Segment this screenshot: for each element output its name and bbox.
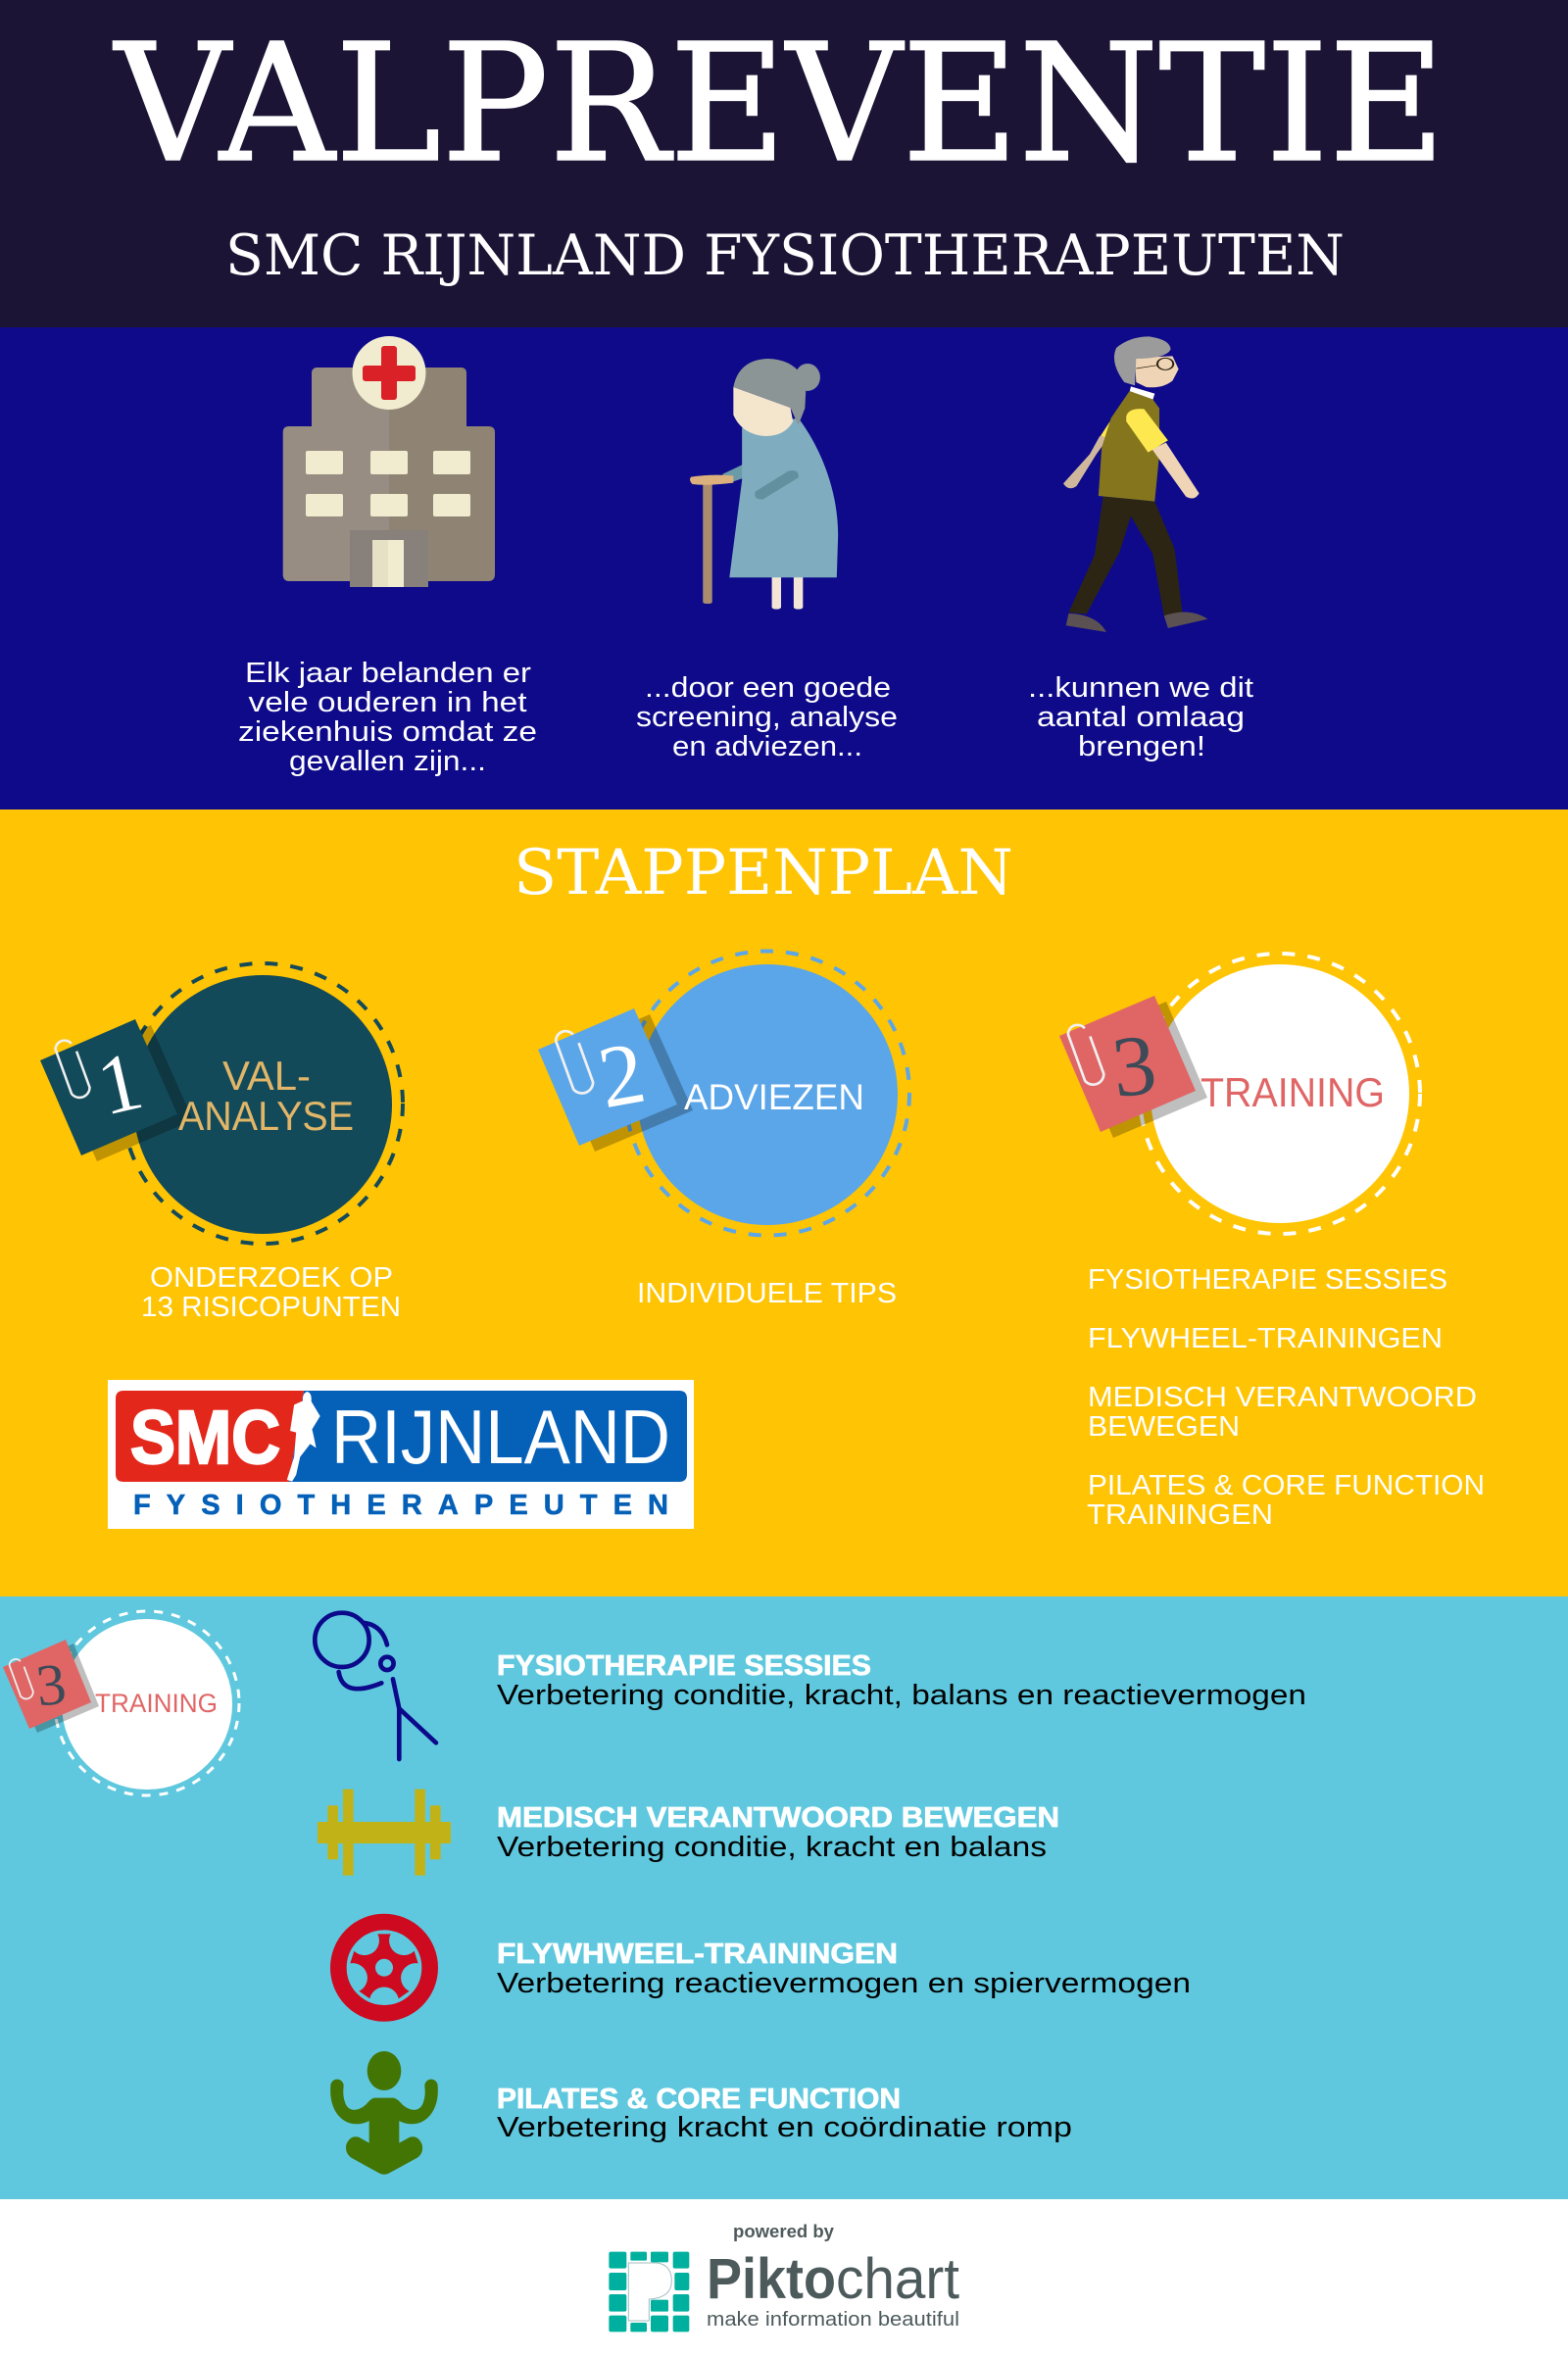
step 3 list: BEWEGEN (1088, 1411, 1240, 1443)
text block: hospital: gevallen zijn... (289, 746, 486, 777)
step 3 list: PILATES & CORE FUNCTION (1088, 1470, 1485, 1501)
panel: training details (0, 1596, 1568, 2199)
text block: result: ...kunnen we dit (1028, 672, 1253, 704)
subtitle: SMC RIJNLAND FYSIOTHERAPEUTEN (225, 223, 1345, 288)
text block: hospital: vele ouderen in het (249, 687, 527, 718)
logo: SMC Rijnland Fysiotherapeuten: SMC (130, 1396, 280, 1480)
text block: result: brengen! (1078, 731, 1205, 762)
piktochart wordmark (707, 2247, 959, 2331)
text: fysiotherapie sessies (497, 1650, 1306, 1711)
icon: meditating figure (330, 2051, 438, 2175)
step 3 badge (1059, 954, 1420, 1234)
step 3 list: FLYWHEEL-TRAININGEN (1088, 1323, 1443, 1354)
step 1 badge: 1 (89, 1034, 151, 1134)
piktochart wordmark: make information beautiful (707, 2309, 959, 2331)
icon: barbell (318, 1790, 451, 1876)
text: flywheel-trainingen: FLYWHWEEL-TRAININGEN (497, 1939, 898, 1970)
step 3 list: FYSIOTHERAPIE SESSIES (1088, 1264, 1447, 1296)
title: VALPREVENTIE (113, 10, 1446, 199)
icon: piktochart logo (609, 2252, 689, 2331)
text: flywheel-trainingen (497, 1939, 1191, 1999)
piktochart wordmark: Pikto (707, 2247, 836, 2311)
panel: header (0, 0, 1568, 327)
step 3 list (1087, 1264, 1485, 1531)
step 2 badge: ADVIEZEN (684, 1077, 864, 1117)
text block: screening: screening, analyse (636, 702, 898, 733)
piktochart wordmark: chart (836, 2247, 959, 2311)
text: flywheel-trainingen: Verbetering reactievermogen en spiervermogen (497, 1968, 1191, 1999)
text: pilates and core function (497, 2084, 1072, 2143)
step 1 badge (40, 963, 403, 1244)
step 3 list: MEDISCH VERANTWOORD (1088, 1382, 1477, 1413)
small training badge (3, 1611, 239, 1795)
text: fysiotherapie sessies: FYSIOTHERAPIE SESSIES (497, 1650, 871, 1682)
panel: footer (0, 2199, 1568, 2356)
step 1 caption (141, 1262, 401, 1323)
powered by: powered by (733, 2222, 834, 2241)
step 1 caption: ONDERZOEK OP (150, 1262, 393, 1294)
heading: stappenplan: STAPPENPLAN (514, 837, 1013, 909)
step 1 badge: VAL- (222, 1053, 311, 1099)
step 3 list: TRAININGEN (1087, 1499, 1273, 1531)
text block: screening: en adviezen... (672, 731, 862, 762)
panel: intro (0, 327, 1568, 810)
text: fysiotherapie sessies: Verbetering conditie, kracht, balans en reactievermogen (497, 1680, 1306, 1711)
step 2 caption: INDIVIDUELE TIPS (637, 1278, 897, 1309)
step 3 badge: TRAINING (1200, 1069, 1385, 1115)
step 2 badge (538, 951, 909, 1235)
icon: elderly woman with cane (690, 359, 838, 610)
text block: screening (636, 672, 898, 762)
icon: hospital (283, 336, 495, 587)
step 1 caption: 13 RISICOPUNTEN (141, 1292, 401, 1323)
text block: hospital: ziekenhuis omdat ze (238, 716, 537, 748)
text block: screening: ...door een goede (645, 672, 891, 704)
icon: flywheel (338, 1922, 430, 2013)
text block: hospital (238, 658, 537, 777)
icon: elderly man walking (1063, 336, 1207, 632)
step 1 badge: ANALYSE (178, 1093, 354, 1139)
panel: stappenplan (0, 810, 1568, 1597)
text: medisch verantwoord bewegen: Verbetering conditie, kracht en balans (497, 1832, 1047, 1863)
text block: hospital: Elk jaar belanden er (245, 658, 531, 689)
logo: SMC Rijnland Fysiotherapeuten (108, 1380, 694, 1529)
step 2 badge: 2 (592, 1024, 652, 1127)
text block: result (1028, 672, 1253, 762)
small training badge: 3 (33, 1651, 69, 1718)
small training badge: TRAINING (95, 1689, 218, 1718)
icon: stick figure with ball (315, 1613, 436, 1759)
text block: result: aantal omlaag (1037, 702, 1245, 733)
text: pilates and core function: PILATES & CORE FUNCTION (497, 2084, 901, 2115)
logo: SMC Rijnland Fysiotherapeuten: FYSIOTHERAPEUTEN (133, 1490, 668, 1521)
logo: SMC Rijnland Fysiotherapeuten: RIJNLAND (331, 1394, 670, 1480)
text: medisch verantwoord bewegen: MEDISCH VERANTWOORD BEWEGEN (497, 1802, 1059, 1834)
step 3 badge: 3 (1107, 1017, 1160, 1116)
text: medisch verantwoord bewegen (497, 1802, 1059, 1863)
text: pilates and core function: Verbetering kracht en coördinatie romp (497, 2112, 1072, 2143)
